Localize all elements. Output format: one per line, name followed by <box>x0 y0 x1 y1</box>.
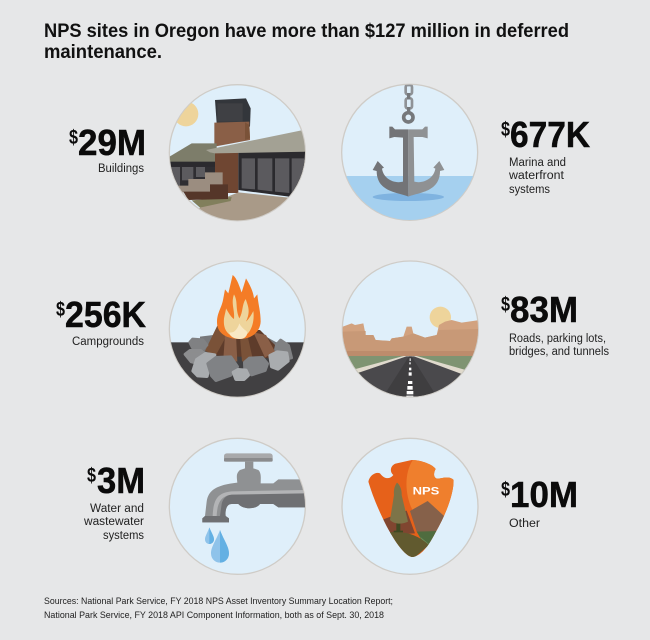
panel: other <box>342 438 578 574</box>
icon: NPS arrowhead <box>342 438 478 574</box>
label: Campgrounds: Campgrounds <box>72 336 144 348</box>
label: Marina and waterfront systems: waterfront <box>508 170 565 182</box>
icon: building <box>167 85 308 223</box>
value: $3M: 3M <box>97 460 145 501</box>
value: $29M: $ <box>69 127 78 149</box>
value: $3M: $ <box>87 465 96 487</box>
title: maintenance. <box>44 41 162 63</box>
label: Other: Other <box>509 518 540 530</box>
value: $677K: 677K <box>510 114 590 155</box>
label: Water and wastewater systems: systems <box>103 530 144 542</box>
label: Water and wastewater systems: Water and <box>90 503 144 515</box>
icon: road <box>340 261 480 399</box>
text: NPS: NPS <box>413 486 439 498</box>
sources: Sources: National Park Service, FY 2018 NPS Asset Inventory Summary Location Report; <box>44 596 393 607</box>
sources <box>44 596 393 621</box>
panel: campgrounds <box>56 261 310 399</box>
label: Water and wastewater systems <box>83 503 144 542</box>
sources: National Park Service, FY 2018 API Component Information, both as of Sept. 30, 2018 <box>44 610 384 621</box>
panel: roads, parking lots, bridges, and tunnels <box>340 261 609 399</box>
icon: anchor <box>340 84 480 223</box>
title: NPS sites in Oregon have more than $127 million in deferred <box>44 20 569 42</box>
icon: campfire <box>167 261 310 399</box>
label: Water and wastewater systems: wastewater <box>83 516 144 528</box>
value: $10M: $ <box>501 479 510 501</box>
label: Roads, parking lots, bridges, and tunnels <box>509 333 609 358</box>
value: $29M: 29M <box>78 122 146 163</box>
panel: marina and waterfront systems <box>340 84 590 223</box>
panel: water and wastewater systems <box>83 438 307 574</box>
value: $83M: 83M <box>510 289 578 330</box>
label: Buildings: Buildings <box>98 163 144 175</box>
label: Marina and waterfront systems <box>508 157 566 196</box>
label: Roads, parking lots, bridges, and tunnels: bridges, and tunnels <box>509 346 609 358</box>
label: Marina and waterfront systems: systems <box>509 184 550 196</box>
value: $256K: $ <box>56 299 65 321</box>
value: $10M: 10M <box>510 474 578 515</box>
title <box>44 20 569 63</box>
value: $677K: $ <box>501 119 510 141</box>
label: Roads, parking lots, bridges, and tunnels: Roads, parking lots, <box>509 333 606 345</box>
value: $83M: $ <box>501 294 510 316</box>
value: $256K: 256K <box>65 294 146 335</box>
panel: buildings <box>69 85 308 223</box>
icon: faucet <box>169 438 307 574</box>
label: Marina and waterfront systems: Marina and <box>509 157 566 169</box>
